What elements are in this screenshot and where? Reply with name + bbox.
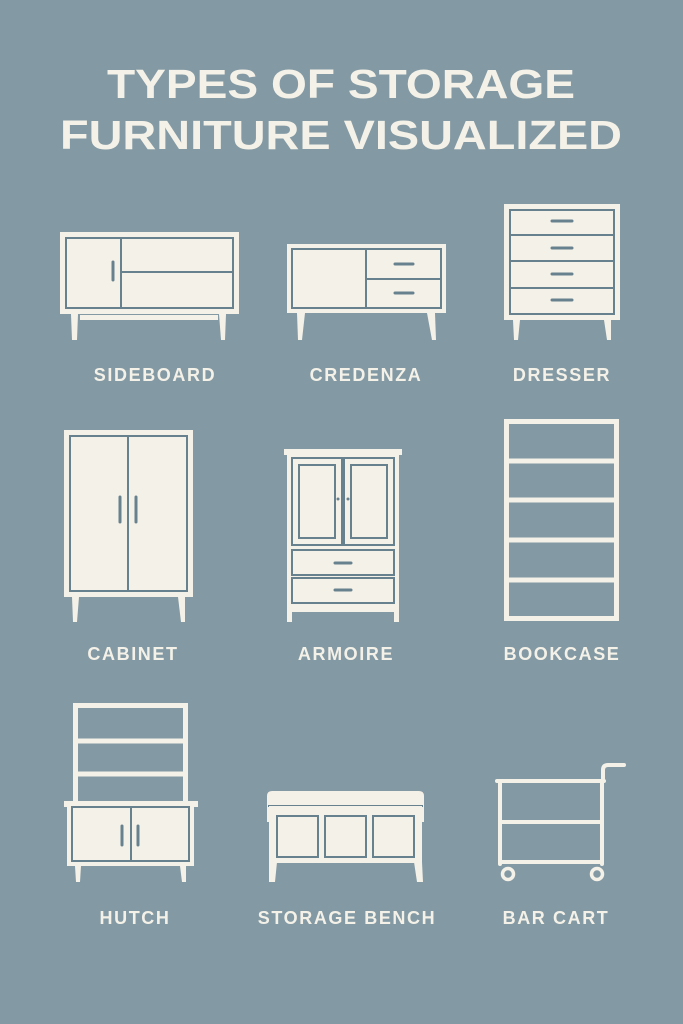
icon: armoire — [284, 449, 402, 622]
icon: credenza — [287, 244, 446, 340]
label: sideboard: SIDEBOARD — [94, 365, 216, 385]
label: credenza: CREDENZA — [310, 365, 422, 385]
label: hutch: HUTCH — [100, 908, 170, 928]
label: storage bench: STORAGE BENCH — [258, 908, 436, 928]
icon: bar cart — [497, 765, 624, 880]
icon: cabinet — [64, 430, 193, 622]
title: FURNITURE VISUALIZED — [60, 112, 622, 158]
icon: sideboard — [60, 232, 239, 340]
icon: storage bench — [267, 791, 424, 882]
label: bar cart: BAR CART — [503, 908, 609, 928]
label: dresser: DRESSER — [513, 365, 611, 385]
icon: dresser — [504, 204, 620, 340]
label: armoire: ARMOIRE — [298, 644, 394, 664]
label: cabinet: CABINET — [87, 644, 179, 664]
icon: hutch — [64, 706, 198, 882]
icon: bookcase — [506, 422, 617, 618]
title — [60, 61, 622, 158]
label: bookcase: BOOKCASE — [504, 644, 620, 664]
title: TYPES OF STORAGE — [107, 61, 575, 107]
